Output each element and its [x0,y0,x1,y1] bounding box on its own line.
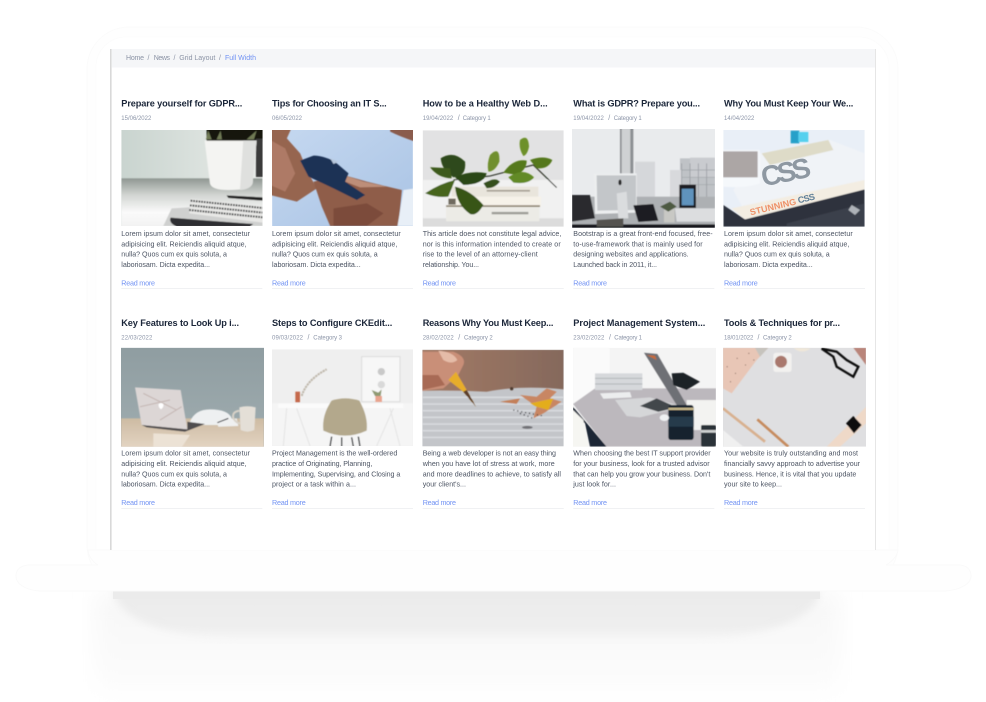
excerpt: nulla? Quos cum ex quis soluta, a [272,251,378,259]
card: Why You Must Keep Your Website: Read more [724,278,758,288]
card: Tools and Techniques: / [758,334,760,342]
card: Tools and Techniques: Read more [724,498,758,507]
excerpt: just look for... [572,481,616,489]
excerpt: When choosing the best IT support provider [573,450,711,458]
card: Steps to Configure CKEditor: Read more [272,498,306,507]
card: Reasons Why You Must Keep: Read more [423,498,456,507]
card: Project Management System: 23/02/2022 [573,336,605,342]
card: How to be a Healthy Web: 19/04/2022 [423,116,454,122]
breadcrumb bar: Full Width [225,55,256,62]
excerpt: Lorem ipsum dolor sit amet, consectetur [272,230,401,238]
excerpt: for your business, look for a trusted advisor [573,460,710,468]
card: Key Features to Look Up: 22/03/2022 [121,336,153,342]
excerpt: laboriosam. Dicta expedita... [724,261,813,269]
excerpt [422,450,561,489]
excerpt: Lorem ipsum dolor sit amet, consectetur [724,230,853,238]
photo: CSS books and phone [723,130,865,227]
excerpt [121,450,251,489]
excerpt [272,230,401,269]
card: Tips for Choosing an IT: Tips for Choosing an IT S... [272,98,387,108]
photo: CSS books and phone: CSS [797,192,816,205]
excerpt: laboriosam. Dicta expedita... [121,261,210,269]
card: Tools and Techniques: 18/01/2022 [724,336,754,342]
card: Reasons Why You Must Keep: / [458,334,460,342]
excerpt: adipisicing elit. Reiciendis aliquid atque, [272,240,397,248]
card: Prepare yourself for GDPR: Prepare yourself for GDPR... [121,98,242,108]
excerpt: to-use-framework that is mainly used for [573,240,703,248]
card: How to be a Healthy Web [423,98,564,289]
breadcrumb bar: / [148,55,150,62]
excerpt [724,230,853,269]
photo: flat lay with glasses and watch [723,348,866,447]
excerpt: Project Management is the well-ordered [272,450,397,458]
excerpt: your site to keep... [724,481,782,489]
photo: desk plant and notebook [121,130,263,226]
card: Project Management System: / [609,334,611,342]
breadcrumb bar: / [174,55,176,62]
excerpt: adipisicing elit. Reiciendis aliquid atque, [724,240,849,248]
card: How to be a Healthy Web: Category 1 [463,116,491,122]
excerpt: that can help you grow your business. Don't [573,470,710,478]
excerpt: practice of Originating, Planning, [272,460,372,468]
photo: laptop on grey desk [573,348,716,447]
card: What is GDPR: Read more [573,278,607,288]
card: Prepare yourself for GDPR: Read more [121,278,155,288]
excerpt: Launched back in 2011, it... [573,261,657,269]
card: Key Features to Look Up: Read more [121,498,155,507]
photo: hands holding phone [272,130,413,226]
card: Steps to Configure CKEditor: Steps to Configure CKEdit... [272,318,392,328]
excerpt [423,230,561,269]
excerpt [121,230,251,269]
excerpt [272,450,400,489]
card: How to be a Healthy Web: How to be a Healthy Web D... [423,98,548,108]
breadcrumb bar: / [219,55,221,62]
card: Why You Must Keep Your Website: 14/04/2022 [724,116,755,122]
card: Reasons Why You Must Keep: 28/02/2022 [423,336,454,342]
card: Prepare yourself for GDPR: 15/06/2022 [121,116,152,122]
excerpt: nulla? Quos cum ex quis soluta, a [724,251,830,259]
card: Tips for Choosing an IT: 06/05/2022 [272,116,303,122]
excerpt: Bootstrap is a great front-end focused, free- [573,230,713,238]
excerpt: rise to the level of an attorney-client [423,251,538,259]
card: Reasons Why You Must Keep: Category 2 [464,336,493,342]
excerpt: nulla? Quos cum ex quis soluta, a [121,251,227,259]
photo: CSS books and phone: CSS [758,152,813,193]
card: Tools and Techniques: Category 2 [763,336,792,342]
card: What is GDPR: 19/04/2022 [573,116,604,122]
card: Steps to Configure CKEditor [272,318,413,509]
card: Tools and Techniques: Tools & Techniques for pr... [724,318,840,328]
excerpt: laboriosam. Dicta expedita... [272,261,361,269]
excerpt: Lorem ipsum dolor sit amet, consectetur [121,450,251,458]
card: Why You Must Keep Your Website: Why You Must Keep Your We... [724,98,853,108]
card: Key Features to Look Up [121,318,264,509]
card: How to be a Healthy Web: / [458,115,460,122]
excerpt: Implementing, Supervising, and Closing a [272,470,400,478]
card: Reasons Why You Must Keep [422,318,564,509]
ground shadow under laptop [95,591,840,702]
excerpt [573,230,713,269]
card: Prepare yourself for GDPR [121,98,263,289]
excerpt: financially savvy approach to advertise your [724,460,861,468]
photo: green plant on books [422,130,564,226]
card: Steps to Configure CKEditor: Category 3 [313,336,343,342]
excerpt: project or a task within a... [272,481,356,489]
card: Project Management System: Project Management System... [573,318,705,328]
excerpt: business. Hence, it is vital that you update [724,470,856,478]
excerpt: and more deadlines to achieve, to satisfy all [423,470,561,478]
card: Reasons Why You Must Keep: Reasons Why You Must Keep... [423,318,553,328]
excerpt: nor is this information intended to create or [423,240,561,248]
excerpt [572,450,711,489]
card: Tools and Techniques [723,318,866,509]
card: Steps to Configure CKEditor: / [308,334,310,342]
photo: white desk with beige chair [272,350,413,446]
excerpt: adipisicing elit. Reiciendis aliquid atque, [121,460,247,468]
breadcrumb bar [112,49,875,68]
card: Project Management System [572,318,716,509]
excerpt: Your website is truly outstanding and most [724,450,858,458]
card: What is GDPR [572,98,715,289]
photo: office desk with iMac [572,129,715,228]
card: Tips for Choosing an IT: Read more [272,278,306,288]
photo: marble laptop on wooden table [121,348,264,447]
excerpt: nulla? Quos cum ex quis soluta, a [121,470,227,478]
card: Key Features to Look Up: Key Features to Look Up i... [121,318,239,328]
card: Steps to Configure CKEditor: 09/03/2022 [272,336,304,342]
card: What is GDPR: What is GDPR? Prepare you... [573,98,700,108]
excerpt: designing websites and applications. [573,251,689,259]
excerpt: adipisicing elit. Reiciendis aliquid atque, [121,240,247,248]
excerpt: Lorem ipsum dolor sit amet, consectetur [121,230,251,238]
excerpt: Being a web developer is not an easy thing [423,450,556,458]
excerpt: relationship. You... [423,261,479,269]
photo: pencil writing on paper [422,350,564,446]
card: Project Management System: Read more [573,498,607,507]
excerpt: your client's... [423,481,466,489]
card: Tips for Choosing an IT [270,98,415,289]
breadcrumb bar: Grid Layout [179,55,215,62]
breadcrumb bar: News [154,55,170,62]
photo: CSS books and phone: STUNNING [749,197,797,217]
card: What is GDPR: Category 1 [614,116,642,122]
card: How to be a Healthy Web: Read more [423,278,456,288]
breadcrumb bar: Home [126,55,144,62]
screen [110,49,876,550]
card: Why You Must Keep Your Website [722,98,865,289]
excerpt: when you have lot of stress at work, more [422,460,555,468]
excerpt [724,450,861,489]
card: Project Management System: Category 1 [614,336,643,342]
excerpt: laboriosam. Dicta expedita... [121,481,210,489]
card: What is GDPR: / [608,115,610,122]
laptop body [16,27,971,591]
excerpt: This article does not constitute legal advice, [423,230,561,238]
